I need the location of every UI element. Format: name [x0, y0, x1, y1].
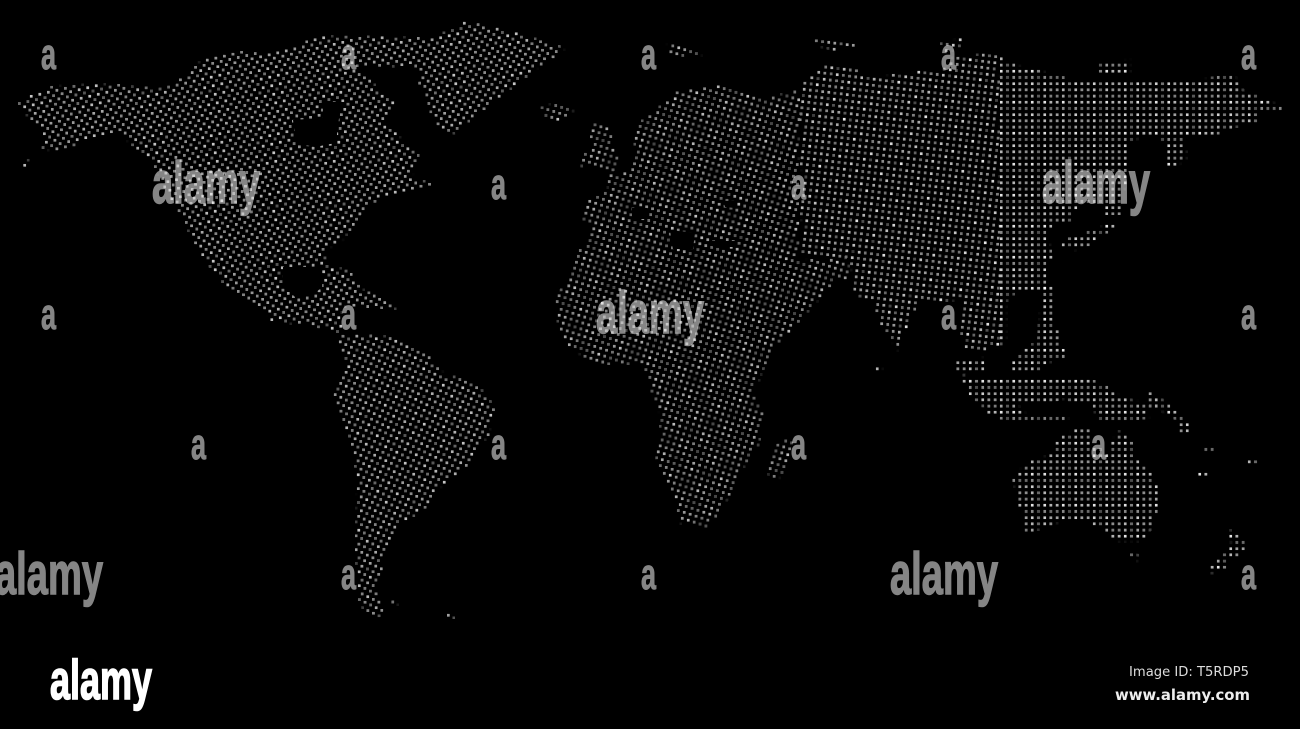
- small repeated watermark letters: a: [941, 30, 956, 79]
- Japan: [1058, 222, 1120, 253]
- Africa and Arabia: [555, 258, 850, 530]
- small repeated watermark letters: a: [1241, 550, 1256, 599]
- Europe: [572, 85, 800, 258]
- Sri Lanka: [873, 363, 884, 374]
- small repeated watermark letters: a: [41, 30, 56, 79]
- large alamy watermarks: alamy: [152, 150, 260, 216]
- large alamy watermarks: alamy: [1042, 150, 1150, 216]
- small repeated watermark letters: a: [341, 550, 356, 599]
- large alamy watermarks: [0, 150, 1150, 607]
- Central Asia and India: [800, 53, 1000, 358]
- Australia: [1012, 428, 1158, 543]
- small repeated watermark letters: a: [1091, 420, 1106, 469]
- Pacific islands: [1197, 447, 1260, 480]
- small repeated watermark letters: a: [341, 290, 356, 339]
- North America and Greenland: [15, 20, 567, 335]
- small repeated watermark letters: a: [1241, 30, 1256, 79]
- small repeated watermark letters: [41, 30, 1256, 599]
- Britain: [578, 120, 622, 177]
- alamy logo: alamy: [50, 648, 152, 711]
- small repeated watermark letters: a: [491, 420, 506, 469]
- small repeated watermark letters: a: [191, 420, 206, 469]
- small repeated watermark letters: a: [641, 550, 656, 599]
- South America: [332, 333, 497, 620]
- small repeated watermark letters: a: [1241, 290, 1256, 339]
- New Zealand: [1205, 527, 1252, 575]
- Iceland: [540, 100, 575, 122]
- small repeated watermark letters: a: [791, 160, 806, 209]
- large alamy watermarks: alamy: [890, 541, 998, 607]
- East Asia: [1000, 55, 1283, 346]
- Tasmania: [1130, 548, 1140, 563]
- image id text: Image ID: T5RDP5: [1129, 664, 1249, 680]
- small repeated watermark letters: a: [41, 290, 56, 339]
- small repeated watermark letters: a: [941, 290, 956, 339]
- water cut-outs: Hudson Bay, Gulf of Mexico and inland seas: [283, 102, 737, 297]
- Southeast Asia and Indonesia: [952, 283, 1195, 435]
- small repeated watermark letters: a: [491, 160, 506, 209]
- small repeated watermark letters: a: [341, 30, 356, 79]
- website url: www.alamy.com: [1115, 686, 1250, 704]
- large alamy watermarks: alamy: [596, 280, 704, 346]
- small repeated watermark letters: a: [641, 30, 656, 79]
- large alamy watermarks: alamy: [0, 541, 103, 607]
- small repeated watermark letters: a: [791, 420, 806, 469]
- Madagascar: [766, 434, 796, 482]
- Arctic islands: [665, 37, 1132, 76]
